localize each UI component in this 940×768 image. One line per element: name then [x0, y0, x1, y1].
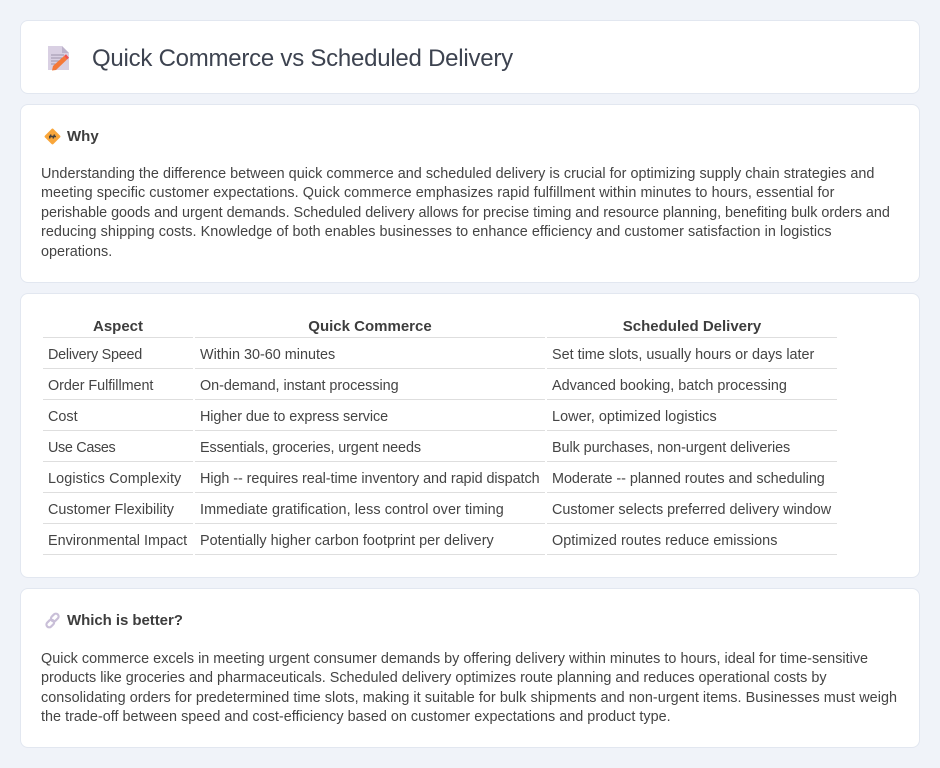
text block: which is better: products like groceries and pharmaceuticals. Scheduled delivery optimizes route planning and reduces operational costs by — [41, 670, 827, 686]
table row: environmental impact: Environmental Impact — [48, 533, 187, 549]
table row: order fulfillment: Advanced booking, batch processing — [552, 378, 787, 394]
table row: delivery speed: Delivery Speed — [48, 347, 142, 363]
text block: why: perishable goods and urgent demands. Scheduled delivery allows for precise timing and resource planning, benefiting bulk orders and — [41, 205, 890, 221]
table: header row: Scheduled Delivery — [623, 318, 761, 335]
text block: why — [41, 166, 890, 260]
table row: use cases — [48, 440, 790, 456]
icon: memo with pencil — [48, 46, 69, 70]
heading: why: Why — [67, 128, 99, 145]
table row: customer flexibility: Immediate gratification, less control over timing — [200, 502, 504, 518]
table row: cost: Higher due to express service — [200, 409, 388, 425]
table row: cost: Lower, optimized logistics — [552, 409, 717, 425]
panel: which is better — [20, 588, 920, 748]
text block: why: operations. — [41, 244, 112, 260]
table row: order fulfillment — [48, 378, 787, 394]
text block: which is better: the trade-off between speed and cost-efficiency based on customer expectations and product type. — [41, 709, 671, 725]
table row: use cases: Bulk purchases, non-urgent deliveries — [552, 440, 790, 456]
text block: why: meeting specific customer expectations. Quick commerce emphasizes rapid fulfillment within minutes to hours, essential for — [41, 185, 834, 201]
table row: customer flexibility: Customer selects preferred delivery window — [552, 502, 831, 518]
table row: use cases: Use Cases — [48, 440, 115, 456]
table row: customer flexibility: Customer Flexibility — [48, 502, 174, 518]
table: header row: Aspect — [93, 318, 143, 335]
table row: customer flexibility — [48, 502, 832, 518]
icon: link — [45, 612, 60, 628]
icon: warning diamond — [44, 128, 60, 144]
table row: cost: Cost — [48, 409, 78, 425]
table row: use cases: Essentials, groceries, urgent needs — [200, 440, 421, 456]
table row: order fulfillment: Order Fulfillment — [48, 378, 153, 394]
panel: title header — [20, 20, 920, 94]
table: header row — [93, 318, 762, 335]
text block: why: reducing shipping costs. Knowledge of both enables businesses to enhance efficiency and customer satisfaction in logistics — [41, 224, 832, 240]
table row: cost — [48, 409, 717, 425]
table row: logistics complexity: Logistics Complexity — [48, 471, 181, 487]
panel: comparison table — [20, 293, 920, 578]
table: header row: Quick Commerce — [308, 318, 432, 335]
text block: which is better — [41, 651, 897, 725]
table row: logistics complexity: High -- requires real-time inventory and rapid dispatch — [200, 471, 540, 487]
text block: which is better: Quick commerce excels in meeting urgent consumer demands by offering delivery within minutes to hours, ideal for time-sensitive — [41, 651, 868, 667]
table row: environmental impact — [48, 533, 777, 549]
heading: which is better: Which is better? — [67, 612, 183, 629]
table row: logistics complexity: Moderate -- planned routes and scheduling — [552, 471, 825, 487]
panel: why — [20, 104, 920, 283]
title: Quick Commerce vs Scheduled Delivery — [92, 45, 513, 72]
table row: order fulfillment: On-demand, instant processing — [200, 378, 399, 394]
table row: logistics complexity — [48, 471, 825, 487]
table row: environmental impact: Optimized routes reduce emissions — [552, 533, 777, 549]
table row: environmental impact: Potentially higher carbon footprint per delivery — [200, 533, 494, 549]
table row: delivery speed — [48, 347, 814, 363]
table row: delivery speed: Within 30-60 minutes — [200, 347, 335, 363]
text block: which is better: consolidating orders for predetermined time slots, making it suitable for bulk shipments and non-urgent items. Businesses must weigh — [41, 690, 897, 706]
table row: delivery speed: Set time slots, usually hours or days later — [552, 347, 814, 363]
text block: why: Understanding the difference between quick commerce and scheduled delivery is crucial for optimizing supply chain strategies and — [41, 166, 874, 182]
